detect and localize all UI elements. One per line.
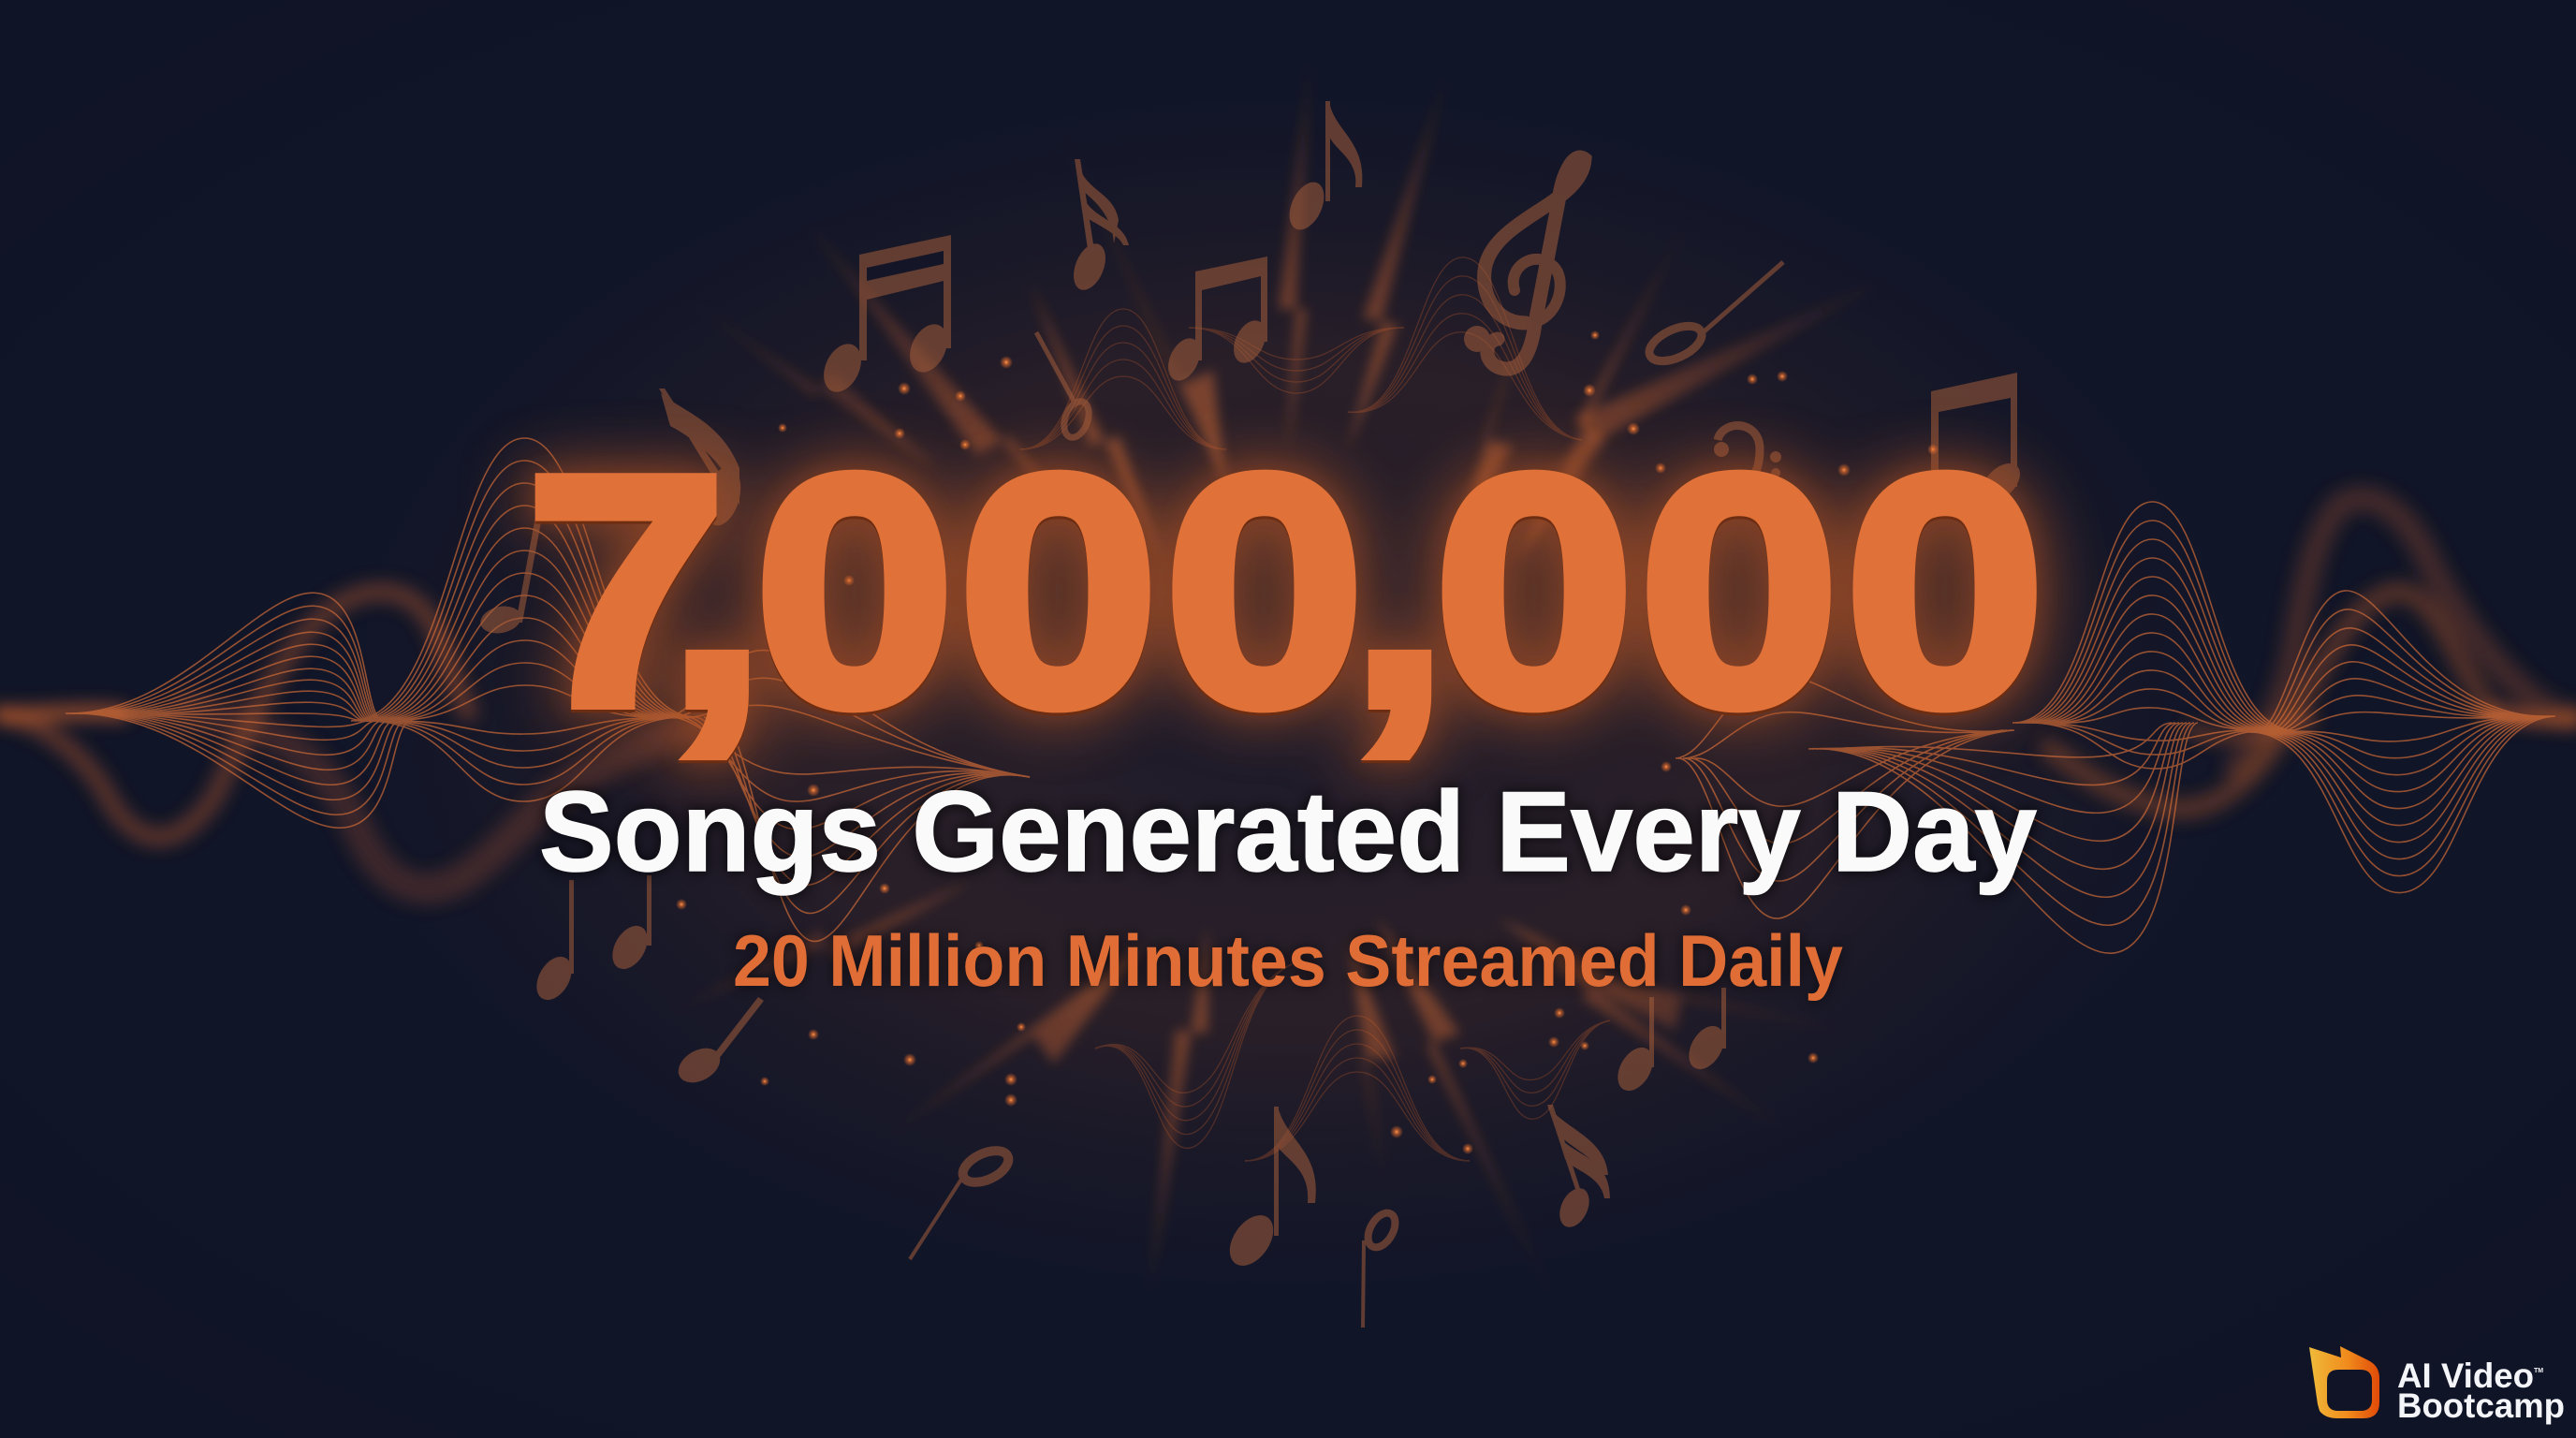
headline number: 7,000,000: 7,000,000 xyxy=(526,407,2045,773)
faint musical notes xyxy=(478,101,2027,1328)
icon: hollow note centre left xyxy=(1036,332,1093,441)
headline number: 7,000,000: 7,000,000 xyxy=(526,410,2045,776)
icon: beamed note top right xyxy=(1931,373,2027,508)
subheading: Songs Generated Every Day: Songs Generated Every Day xyxy=(539,768,2037,895)
supporting line: 20 Million Minutes Streamed Daily: 20 Million Minutes Streamed Daily xyxy=(733,919,1843,1002)
icon: two notes lower right xyxy=(1611,988,1731,1097)
icon: eighth note top xyxy=(1282,101,1362,235)
logo wordmark xyxy=(2397,1357,2565,1425)
subheading: Songs Generated Every Day: Songs Generated Every Day xyxy=(539,768,2037,895)
icon: sixteenth note top xyxy=(1067,159,1129,295)
logo wordmark: Bootcamp xyxy=(2397,1387,2565,1425)
radial light rays xyxy=(655,56,1939,1311)
icon: beamed sixteenth notes xyxy=(816,235,955,398)
icon: note lower left xyxy=(672,997,764,1090)
icon: hollow note bottom centre xyxy=(1363,1209,1400,1328)
headline number: 7,000,000: 7,000,000 xyxy=(526,407,2045,773)
icon: bass clef xyxy=(1714,426,1781,489)
glowing spark particles xyxy=(676,330,1939,1154)
icon: hollow note upper right xyxy=(1644,262,1783,368)
icon: sixteenth note behind seven xyxy=(659,389,747,530)
icon: hollow note bottom left xyxy=(910,1144,1013,1259)
icon: eighth note bottom xyxy=(1221,1107,1316,1273)
sound wave: centre top and bottom meshes xyxy=(1020,243,1610,1189)
logo wordmark: AI Video xyxy=(2397,1357,2534,1395)
logo: AI Video Bootcamp xyxy=(2309,1346,2565,1425)
logo wordmark: TM xyxy=(2534,1368,2543,1374)
icon: two notes lower left xyxy=(530,875,654,1006)
sound wave: right line mesh xyxy=(1676,498,2555,974)
supporting line: 20 Million Minutes Streamed Daily: 20 Million Minutes Streamed Daily xyxy=(733,919,1843,1002)
central orange glow xyxy=(352,94,2224,1292)
icon: note left of seven xyxy=(478,517,542,637)
headline number: 7,000,000: 7,000,000 xyxy=(526,407,2045,773)
icon: sixteenth note bottom right xyxy=(1547,1105,1610,1232)
sound wave: left line mesh xyxy=(66,436,1030,983)
icon: treble clef xyxy=(1464,157,1585,369)
icon: logo flame frame xyxy=(2309,1346,2379,1418)
sound wave: blurred bands xyxy=(0,499,2576,888)
icon: beamed eighth notes centre xyxy=(1162,257,1272,386)
